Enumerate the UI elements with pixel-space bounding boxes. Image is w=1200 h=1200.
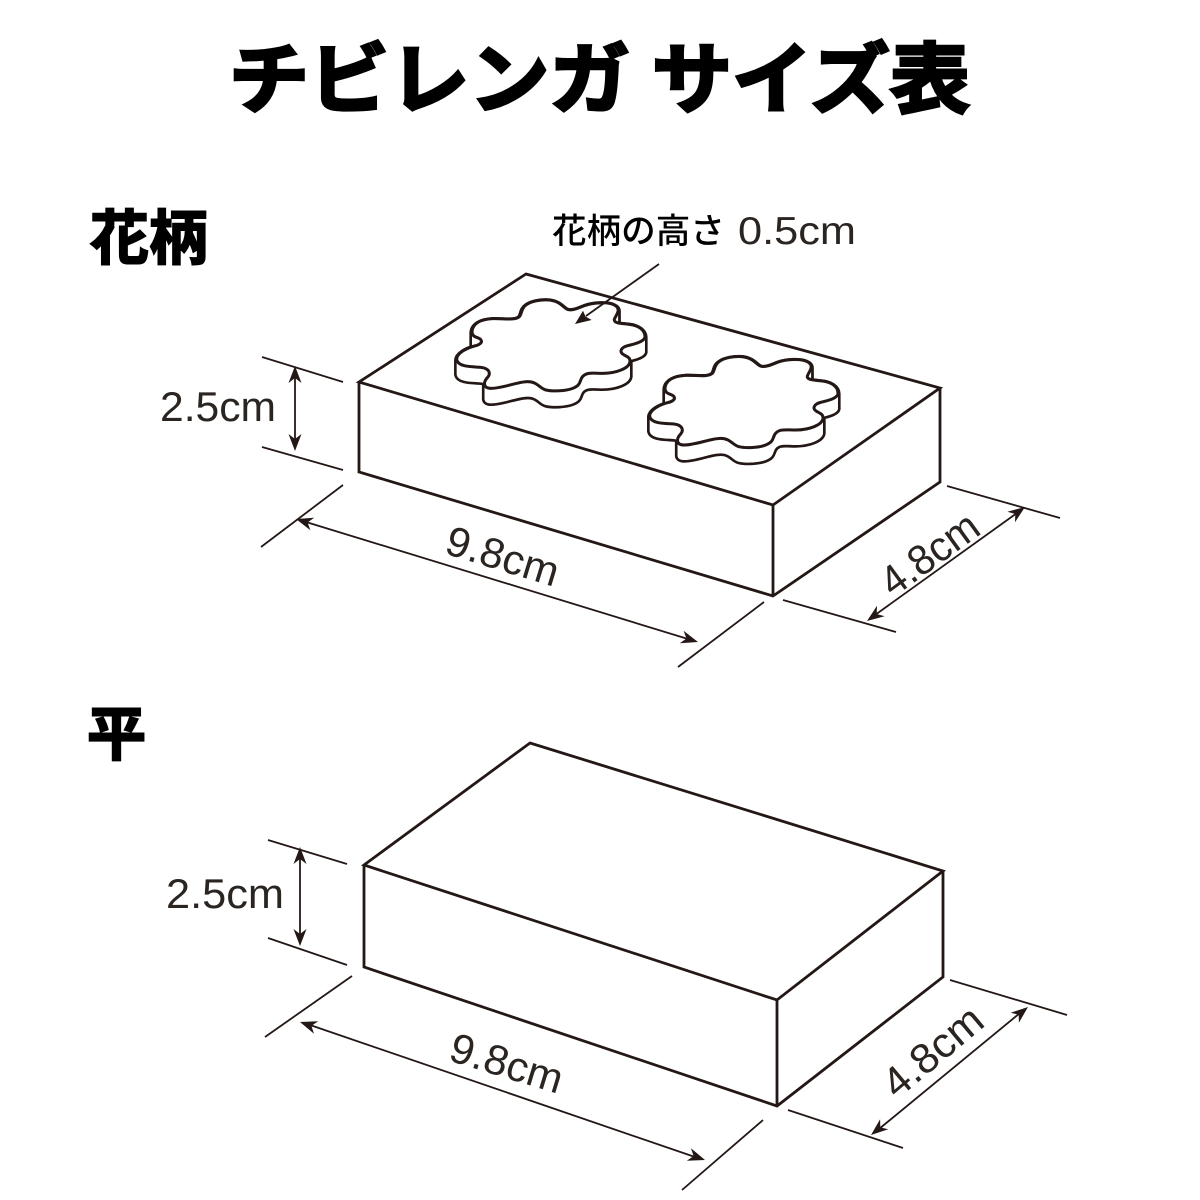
diagram: flat brick xyxy=(166,743,1067,1190)
callout: flower height label: 0.5cm xyxy=(738,210,856,253)
dimension: height 2.5cm xyxy=(166,840,347,965)
title: チビレンガ サイズ表 xyxy=(229,38,970,124)
dimension: width 4.8cm: 4.8cm xyxy=(871,502,988,605)
heading: 花柄: 花柄 xyxy=(90,206,208,272)
dimension: width 4.8cm: 4.8cm xyxy=(873,996,992,1107)
callout: flower height label xyxy=(552,210,856,253)
callout: flower height label: 花柄の高さ xyxy=(552,213,725,251)
dimension: length 9.8cm xyxy=(261,485,764,667)
arrow: flower height pointer xyxy=(575,264,659,324)
icon: flower relief left xyxy=(457,300,645,406)
dimension: length 9.8cm xyxy=(265,976,763,1190)
dimension: width 4.8cm xyxy=(783,486,1060,632)
dimension: length 9.8cm: 9.8cm xyxy=(444,1024,569,1103)
dimension: height 2.5cm xyxy=(160,357,343,470)
icon: flower relief right xyxy=(650,357,838,463)
dimension: width 4.8cm xyxy=(788,980,1067,1148)
brick outline xyxy=(359,274,940,596)
dimension: length 9.8cm: 9.8cm xyxy=(440,517,565,596)
heading: 平: 平 xyxy=(87,702,146,768)
dimension: height 2.5cm: 2.5cm xyxy=(160,383,276,430)
diagram: patterned brick xyxy=(160,264,1060,667)
dimension: height 2.5cm: 2.5cm xyxy=(166,870,284,917)
brick outline xyxy=(364,743,943,1106)
